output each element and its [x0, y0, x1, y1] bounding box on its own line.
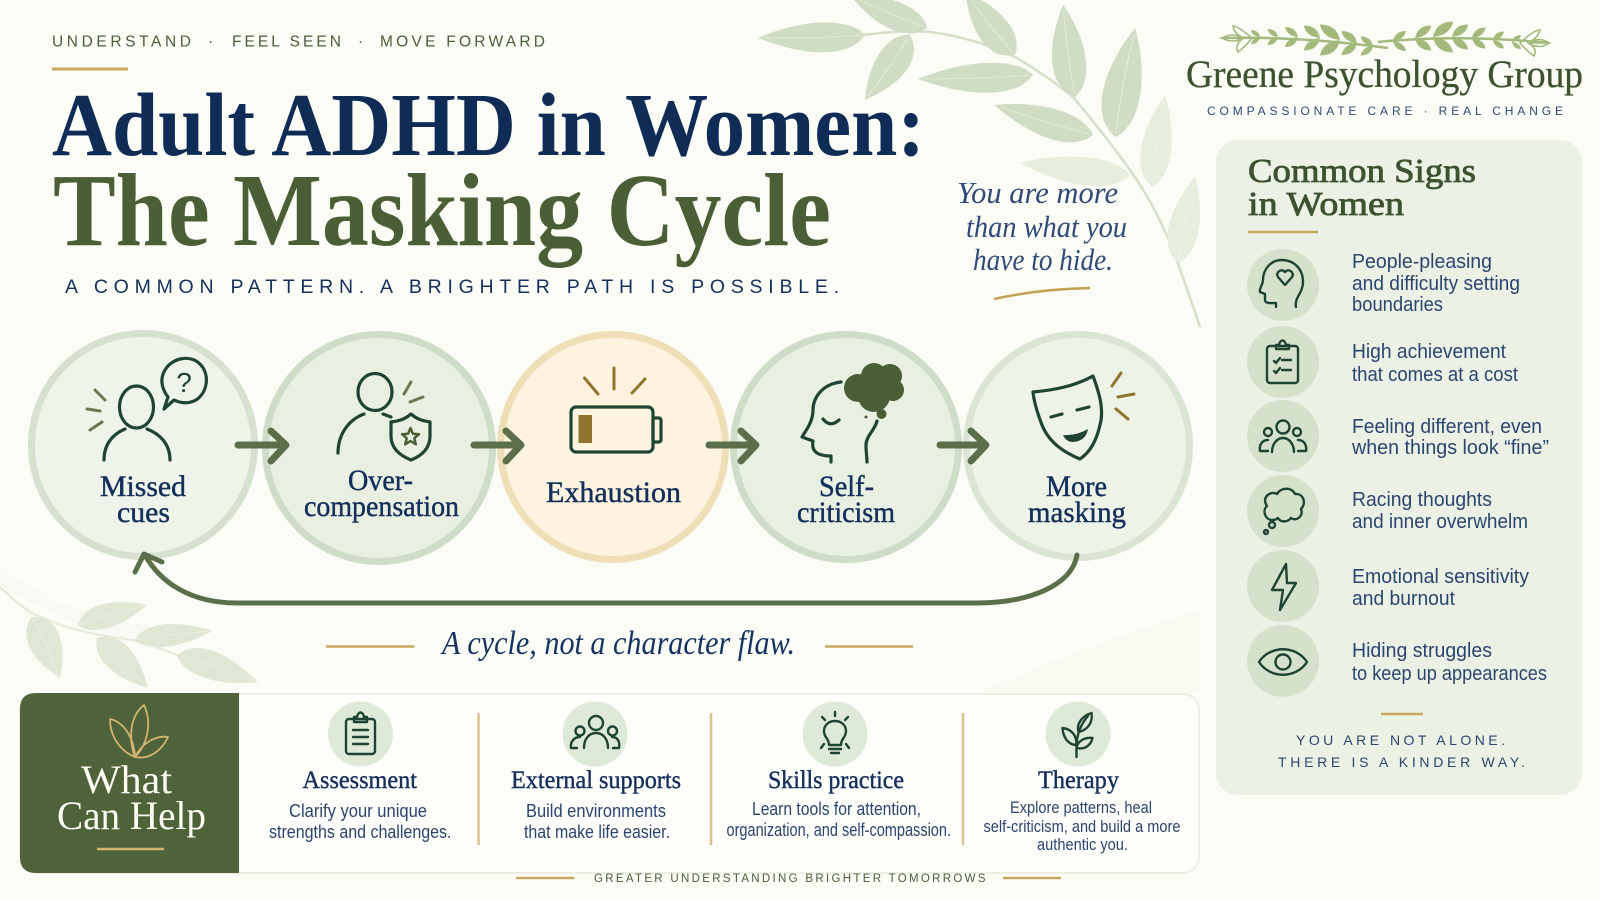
item: assessment — [269, 702, 452, 842]
icon: head with dark cloud — [802, 363, 904, 462]
item: therapy: Explore patterns, heal — [1010, 799, 1152, 817]
sign: people-pleasing: and difficulty setting — [1352, 273, 1520, 295]
sign: emotional sensitivity — [1247, 550, 1529, 622]
cycle: masking cycle diagram — [32, 334, 1190, 603]
step: exhaustion — [500, 334, 726, 560]
item: external supports: that make life easier. — [524, 822, 670, 842]
script quote: You are more — [957, 175, 1118, 210]
sign: racing thoughts — [1247, 475, 1528, 547]
sign: feeling different: when things look “fine” — [1351, 437, 1549, 459]
icon: low battery — [571, 368, 661, 452]
arrow: missed cues to over-compensation — [238, 431, 286, 461]
sign: feeling different — [1247, 400, 1549, 472]
sign: emotional sensitivity: Emotional sensitivity — [1352, 566, 1529, 588]
icon: theatre mask — [1033, 373, 1134, 459]
sign: high achievement: that comes at a cost — [1352, 364, 1518, 386]
icon: person with question: ? — [176, 367, 192, 398]
item: assessment: strengths and challenges. — [269, 822, 452, 842]
item: therapy: self-criticism, and build a more — [984, 818, 1180, 836]
green heading block: Can Help — [57, 793, 206, 838]
item: therapy: Therapy — [1038, 767, 1119, 794]
script quote: have to hide. — [973, 242, 1113, 277]
step: missed cues: cues — [117, 496, 170, 529]
sign: emotional sensitivity: and burnout — [1352, 588, 1455, 610]
item: external supports — [511, 702, 681, 842]
step: self-criticism: Self- — [819, 470, 874, 503]
step: missed cues — [32, 334, 254, 556]
item: assessment: Clarify your unique — [289, 801, 427, 821]
sign: people-pleasing: boundaries — [1352, 294, 1443, 316]
sign: people-pleasing: People-pleasing — [1352, 251, 1492, 273]
title line 2: The Masking Cycle — [53, 153, 831, 268]
tagline: A cycle, not a character flaw. — [440, 625, 795, 662]
item: therapy — [984, 702, 1180, 854]
step: self-criticism — [734, 334, 958, 560]
company tagline: COMPASSIONATE CARE · REAL CHANGE — [1207, 104, 1563, 118]
arrow: exhaustion to self-criticism — [709, 431, 756, 461]
sign: racing thoughts: and inner overwhelm — [1352, 511, 1528, 533]
item: skills practice — [726, 702, 951, 840]
eyebrow text: FEEL SEEN — [232, 34, 341, 50]
eyebrow text: MOVE FORWARD — [380, 34, 545, 50]
panel heading: in Women — [1248, 186, 1404, 223]
item: therapy: authentic you. — [1037, 836, 1128, 854]
step: more masking — [966, 334, 1190, 558]
footer line: GREATER UNDERSTANDING BRIGHTER TOMORROWS — [594, 873, 986, 885]
icon: gold leaves — [110, 705, 168, 758]
subtitle: A COMMON PATTERN. A BRIGHTER PATH IS POSSIBLE. — [65, 276, 839, 298]
sign: hiding struggles: Hiding struggles — [1352, 640, 1492, 662]
decorative leaf branch, bottom left — [0, 587, 262, 697]
panel heading — [1248, 153, 1476, 223]
eyebrow gold rule — [52, 68, 128, 70]
icon: person with question — [87, 358, 206, 460]
step: over-compensation: Over- — [348, 464, 413, 497]
step: self-criticism: criticism — [797, 496, 895, 529]
item: assessment: Assessment — [302, 767, 417, 794]
icon: laurel vine — [1222, 22, 1549, 56]
step: more masking: More — [1046, 470, 1107, 503]
panel closing message — [1278, 732, 1525, 770]
icon: person with shield — [338, 374, 430, 460]
step: exhaustion: Exhaustion — [546, 476, 681, 509]
item: skills practice: organization, and self-compassion. — [726, 820, 951, 840]
panel: common signs — [1216, 140, 1582, 795]
item: external supports: External supports — [511, 767, 681, 794]
panel heading: Common Signs — [1248, 153, 1476, 190]
sign: feeling different: Feeling different, even — [1352, 416, 1542, 438]
step: over-compensation: compensation — [304, 490, 459, 523]
green heading block — [20, 693, 239, 873]
script quote: than what you — [966, 209, 1127, 244]
eyebrow text: UNDERSTAND — [52, 34, 191, 50]
step: over-compensation — [266, 334, 492, 562]
title line 1: Adult ADHD in Women: — [52, 76, 925, 175]
panel closing message: YOU ARE NOT ALONE. — [1296, 732, 1505, 748]
panel: what can help — [20, 693, 1199, 873]
sign: people-pleasing — [1247, 249, 1520, 321]
script quote — [957, 175, 1127, 299]
arrow: return loop — [135, 554, 1077, 603]
item: skills practice: Skills practice — [768, 767, 904, 794]
sign: high achievement: High achievement — [1352, 341, 1506, 363]
panel closing message: THERE IS A KINDER WAY. — [1278, 754, 1525, 770]
sign: hiding struggles: to keep up appearances — [1352, 663, 1547, 685]
arrow: self-criticism to more masking — [940, 431, 986, 461]
arrow: over-compensation to exhaustion — [474, 431, 521, 461]
item: skills practice: Learn tools for attention, — [752, 799, 921, 819]
item: external supports: Build environments — [526, 801, 666, 821]
eyebrow text — [52, 34, 545, 50]
eyebrow text: · — [358, 34, 363, 50]
sign: high achievement — [1247, 326, 1518, 398]
decorative leaf branch, top right — [758, 0, 1209, 327]
green heading block: What — [81, 757, 172, 802]
logo — [1186, 22, 1583, 118]
sign: hiding struggles — [1247, 625, 1547, 697]
sign: racing thoughts: Racing thoughts — [1352, 489, 1492, 511]
step: missed cues: Missed — [100, 470, 186, 503]
step: more masking: masking — [1028, 496, 1126, 529]
eyebrow text: · — [208, 34, 213, 50]
company name: Greene Psychology Group — [1186, 53, 1583, 96]
